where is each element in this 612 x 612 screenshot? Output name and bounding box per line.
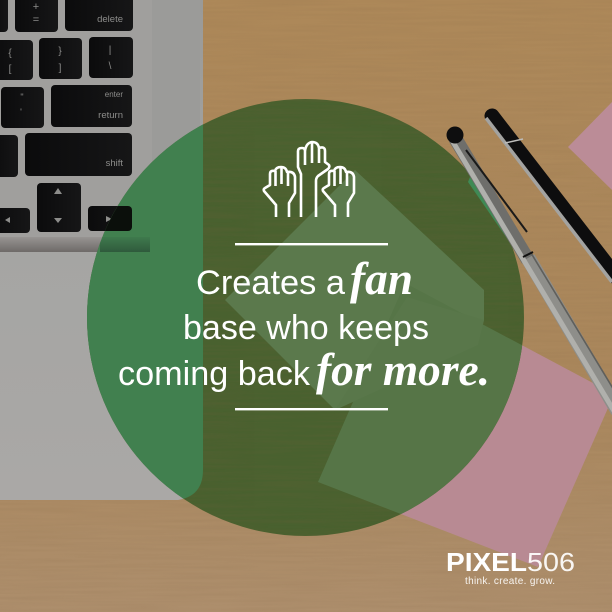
key legends: delete — [97, 14, 123, 25]
key legends: { — [8, 48, 12, 59]
key legends: ' — [20, 107, 22, 117]
pink sticky note, bottom right — [318, 283, 608, 567]
logo: Pixel506: think. create. grow. — [465, 576, 555, 587]
key legends: + — [33, 1, 39, 13]
logo: Pixel506: PIXEL — [446, 547, 527, 577]
key legends: [ — [9, 64, 12, 75]
green translucent circle panel — [87, 99, 524, 536]
key legends: } — [58, 46, 62, 57]
key legends: return — [98, 110, 123, 121]
laptop seen through circle — [87, 124, 203, 498]
key legends: ] — [59, 63, 62, 74]
top divider — [235, 243, 388, 245]
laptop keys — [0, 0, 133, 233]
bright green sliver beside pen — [468, 177, 512, 240]
centre hand — [298, 142, 329, 217]
headline: base who keeps — [183, 309, 429, 347]
sticky notes seen through circle — [225, 170, 484, 410]
key legends: shift — [106, 158, 123, 169]
key legends: | — [109, 45, 111, 56]
logo: Pixel506: 506 — [527, 547, 575, 577]
bottom divider — [235, 408, 388, 410]
arrow key glyphs — [5, 188, 112, 223]
key legends: enter — [105, 90, 123, 99]
key legends: \ — [109, 61, 112, 72]
pink sticky note, top right — [568, 102, 612, 190]
headline: Creates a — [196, 264, 345, 302]
key legends: = — [33, 14, 39, 26]
left hand — [264, 167, 295, 217]
key legends: " — [20, 92, 24, 102]
icon: three raised hands — [264, 142, 354, 217]
logo: Pixel506 — [446, 547, 575, 587]
headline: for more. — [316, 344, 490, 395]
headline: coming back — [118, 355, 311, 393]
headline: fan — [350, 253, 413, 304]
headline — [118, 253, 490, 395]
black pen — [486, 116, 612, 282]
key legends — [8, 1, 123, 169]
laptop — [0, 0, 203, 500]
right hand — [323, 167, 354, 217]
silver stylus pen — [446, 126, 612, 416]
